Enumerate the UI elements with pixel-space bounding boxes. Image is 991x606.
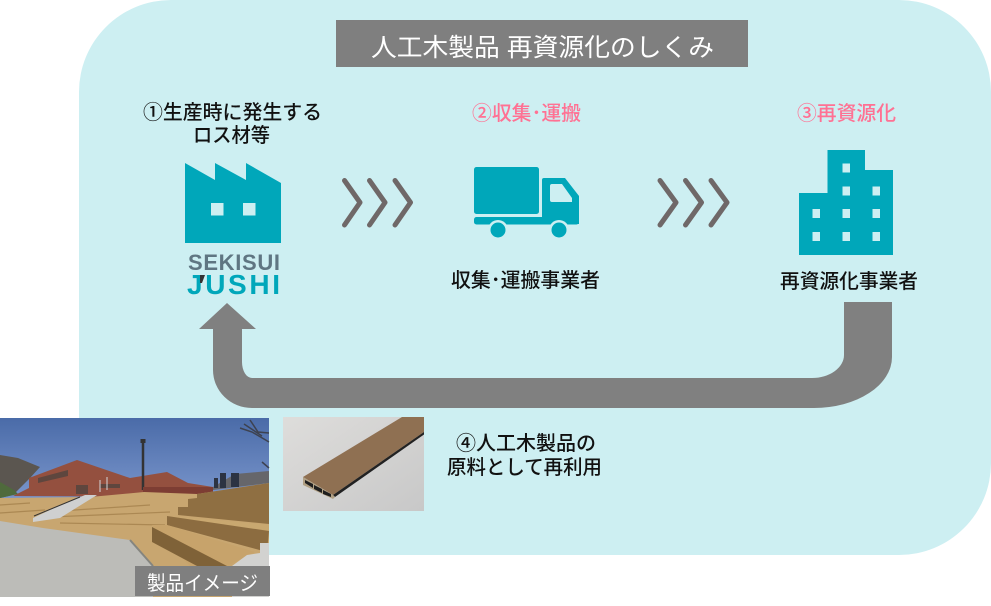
icon: truck <box>474 167 579 240</box>
step 2 label: 収集･運搬事業者 <box>451 269 600 292</box>
photo caption: 製品イメージ <box>147 572 258 595</box>
photo caption <box>135 566 270 596</box>
arrow: return loop <box>199 302 892 408</box>
step 3 label: 再資源化事業者 <box>780 270 918 293</box>
icon: factory <box>185 163 281 243</box>
step 1 heading: ロス材等 <box>193 124 270 147</box>
title: 人工木製品 再資源化のしくみ <box>371 34 714 62</box>
title <box>336 20 748 67</box>
step 3 heading: ③再資源化 <box>797 102 896 125</box>
step 1 heading: ①生産時に発生する <box>143 101 322 124</box>
step 4 text <box>447 432 602 479</box>
photo: product plank <box>283 417 424 511</box>
icon: building <box>799 150 893 255</box>
arrow: chevrons 2 to 3 <box>660 180 727 225</box>
step 4 text: 原料として再利用 <box>447 456 602 479</box>
step 2 heading: ②収集･運搬 <box>472 102 581 125</box>
logo: Sekisui Jushi: JUSHI <box>187 269 280 300</box>
arrow: chevrons 1 to 2 <box>344 180 410 225</box>
step 4 text: ④人工木製品の <box>456 432 596 455</box>
photo: product installation <box>0 418 269 597</box>
logo: Sekisui Jushi: SEKISUI <box>188 250 280 275</box>
step 1 heading <box>143 101 322 147</box>
logo: Sekisui Jushi <box>187 250 280 300</box>
